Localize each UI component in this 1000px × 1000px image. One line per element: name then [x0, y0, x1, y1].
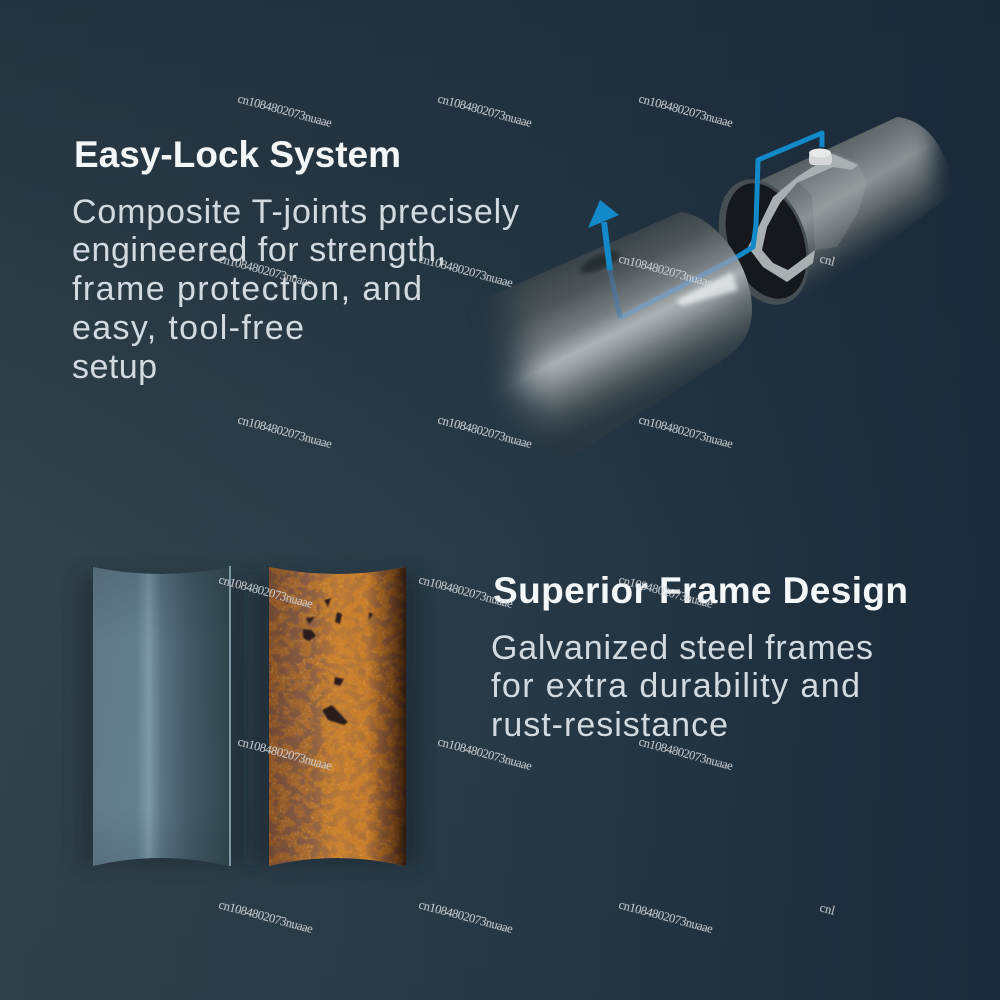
watermarks: cn1084802073nuaae: [236, 412, 334, 451]
watermarks: cn1084802073nuaae: [617, 897, 715, 936]
watermarks: cn1084802073nuaae: [417, 251, 515, 290]
rust pits: [303, 598, 373, 725]
text block: frame design description: [491, 629, 873, 744]
text block: frame design description: rust-resistance: [491, 706, 728, 744]
text block: Easy-Lock description: [72, 193, 519, 386]
watermarks: cn1084802073nuaae: [417, 897, 515, 936]
watermarks: cnl: [818, 900, 837, 918]
tube opening: [702, 167, 826, 317]
watermarks: cn1084802073nuaae: [436, 91, 534, 130]
text block: Easy-Lock description: setup: [72, 348, 157, 386]
watermarks: cn1084802073nuaae: [637, 91, 735, 130]
panel: galvanized steel sample: [78, 566, 246, 866]
heading: Superior Frame Design: Superior Frame Design: [493, 570, 908, 611]
blue arrow passing through front tube: [588, 200, 737, 318]
watermarks: cn1084802073nuaae: [637, 734, 735, 773]
illustration: tube and T-joint: [497, 117, 946, 436]
watermarks: cn1084802073nuaae: [436, 734, 534, 773]
watermarks: cn1084802073nuaae: [236, 91, 334, 130]
panel: rusted steel sample: [254, 560, 420, 870]
text block: Easy-Lock description: engineered for strength,: [72, 231, 446, 269]
text block: Easy-Lock description: frame protection, and: [72, 270, 422, 308]
watermarks: [217, 91, 837, 936]
back tube: [724, 117, 953, 300]
blue path behind joint: [737, 133, 822, 257]
front tube: [497, 212, 752, 436]
watermarks: cn1084802073nuaae: [417, 572, 515, 611]
watermarks: cn1084802073nuaae: [217, 897, 315, 936]
watermarks: cn1084802073nuaae: [637, 412, 735, 451]
text block: frame design description: for extra durability and: [491, 667, 860, 705]
watermarks: cn1084802073nuaae: [217, 251, 315, 290]
watermarks: cn1084802073nuaae: [617, 251, 715, 290]
watermarks: cn1084802073nuaae: [217, 572, 315, 611]
T-joint insert: [748, 152, 867, 282]
watermarks: cnl: [818, 251, 837, 269]
bolt: [809, 148, 832, 165]
watermarks: cn1084802073nuaae: [436, 412, 534, 451]
text block: Easy-Lock description: easy, tool-free: [72, 309, 304, 347]
watermarks: cn1084802073nuaae: [236, 734, 334, 773]
text block: Easy-Lock description: Composite T-joints precisely: [72, 193, 519, 231]
heading: Easy-Lock System: Easy-Lock System: [74, 134, 401, 175]
watermarks: cn1084802073nuaae: [617, 572, 715, 611]
text block: frame design description: Galvanized steel frames: [491, 629, 873, 667]
